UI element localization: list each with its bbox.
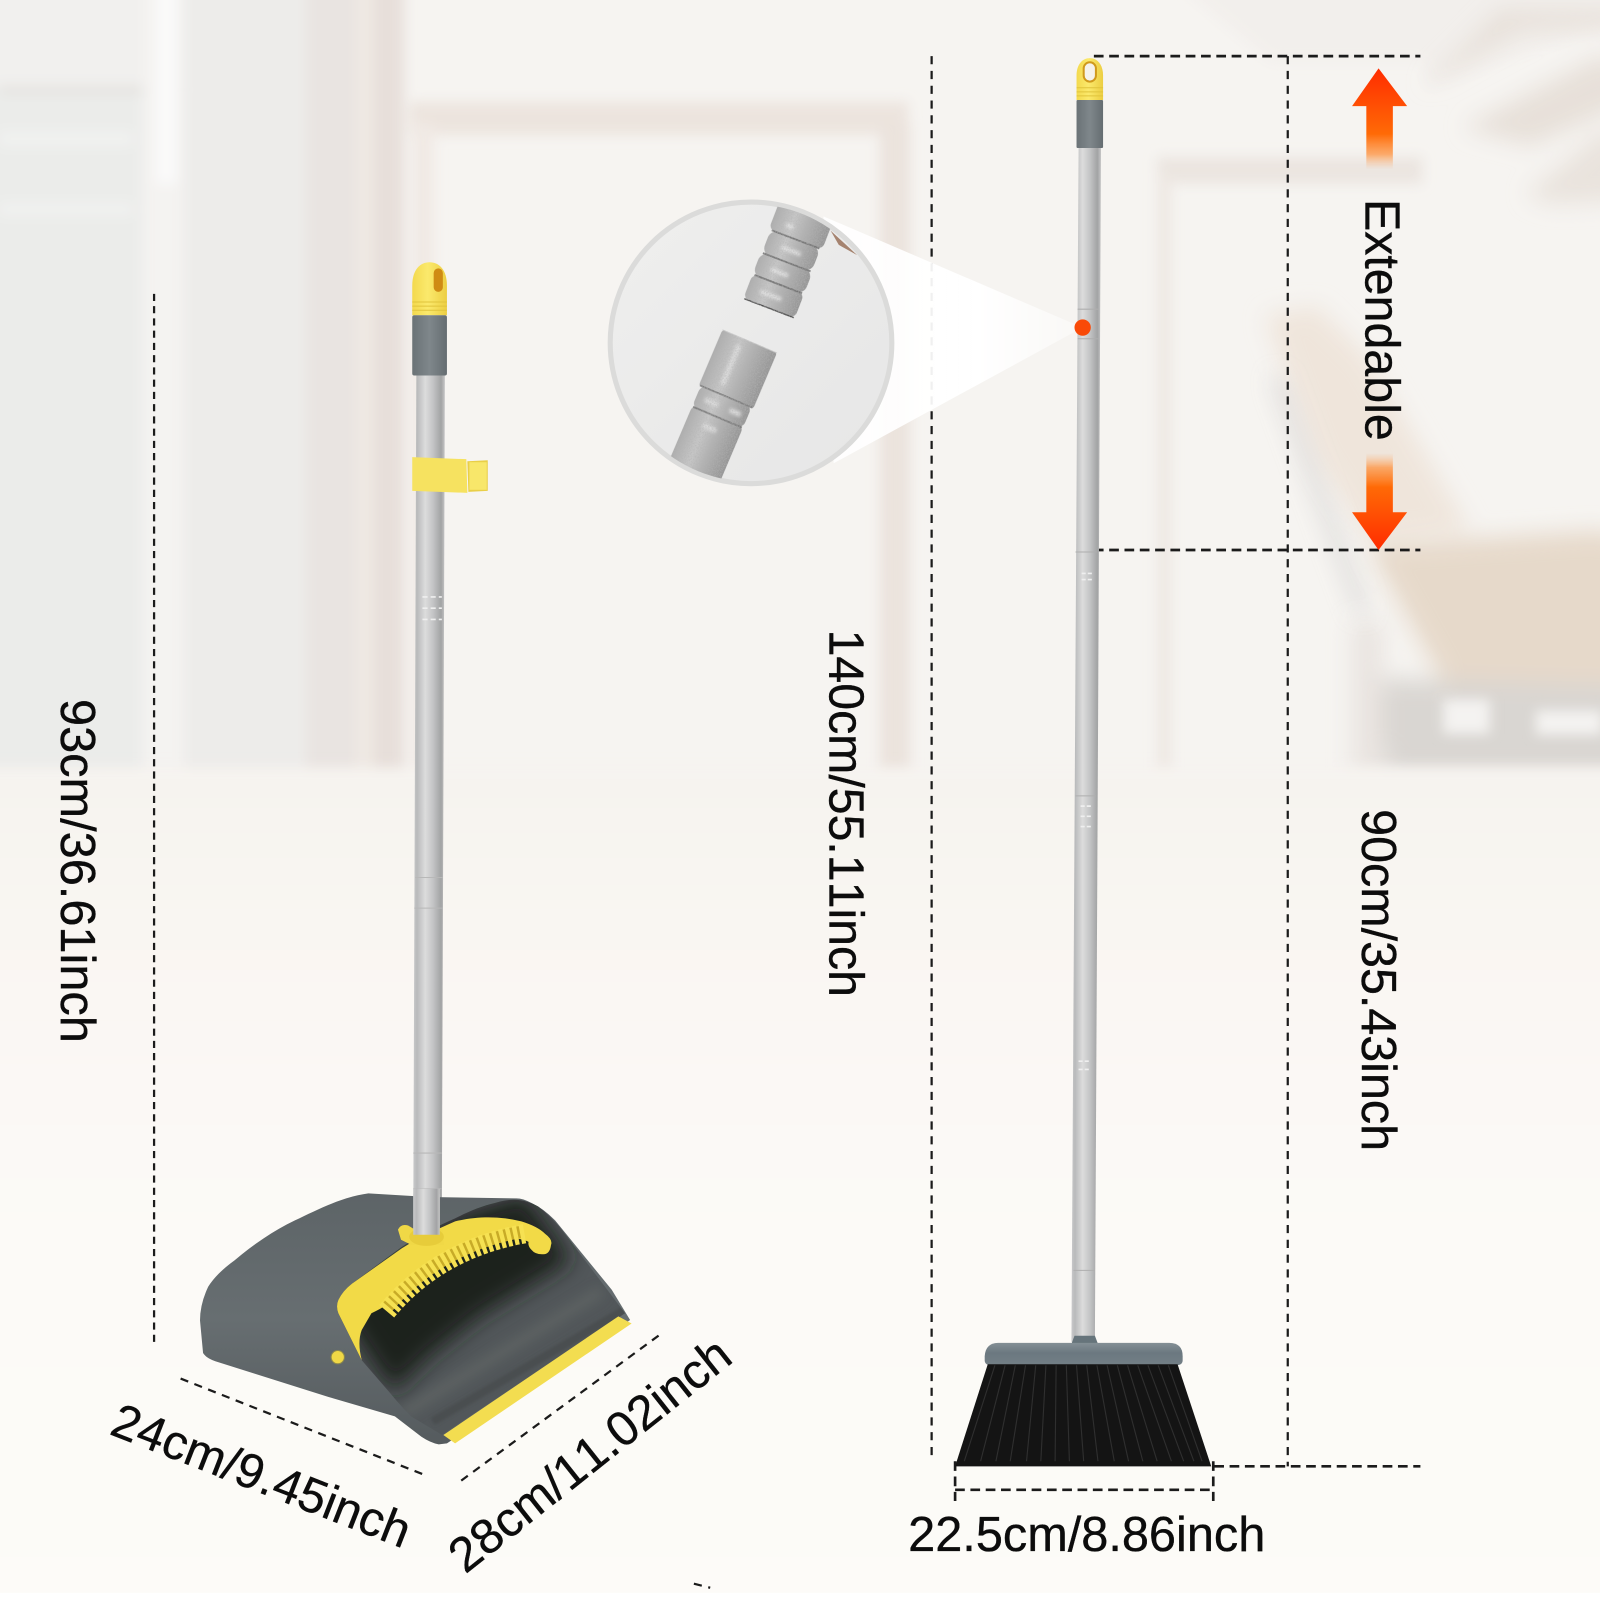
broom bristles — [955, 1364, 1211, 1466]
yellow rubber comb — [337, 1217, 551, 1360]
broom grip — [1077, 58, 1103, 148]
label: broom total height: 140cm/55.11inch — [819, 630, 873, 997]
label: dustpan depth: 24cm/9.45inch — [104, 1394, 419, 1559]
comb pivot collar — [398, 1194, 445, 1246]
dustpan handle pole — [413, 374, 445, 1214]
magnifier lower tube — [671, 330, 777, 478]
magnifier circle: pole joint detail — [610, 195, 892, 512]
dustpan body — [200, 1193, 630, 1444]
dustpan interior — [337, 1200, 625, 1428]
yellow front lip — [443, 1316, 632, 1443]
label: broom collapsed height: 90cm/35.43inch — [1351, 809, 1405, 1151]
broom pole — [1071, 148, 1101, 1342]
dustpan with long handle — [200, 262, 643, 1449]
label: dustpan width: 28cm/11.02inch — [439, 1327, 742, 1583]
label: extendable: Extendable — [1354, 199, 1408, 441]
extendable broom — [955, 58, 1211, 1466]
label: broom head width: 22.5cm/8.86inch — [908, 1508, 1265, 1562]
pole lower section over the pan — [413, 1189, 440, 1240]
dustpan pivot button — [331, 1351, 344, 1364]
label: dustpan height: 93cm/36.61inch — [50, 699, 104, 1043]
broom head — [985, 1336, 1183, 1365]
handle clip — [412, 457, 488, 493]
dimension guide lines — [154, 56, 1420, 1588]
zoom beam from dot to magnifier — [823, 216, 1083, 463]
orange callout dot — [1074, 319, 1091, 336]
dustpan handle grip — [412, 262, 447, 376]
magnifier upper tube — [744, 206, 830, 318]
extendable arrow down — [1352, 453, 1407, 550]
extendable arrow up — [1352, 68, 1407, 169]
